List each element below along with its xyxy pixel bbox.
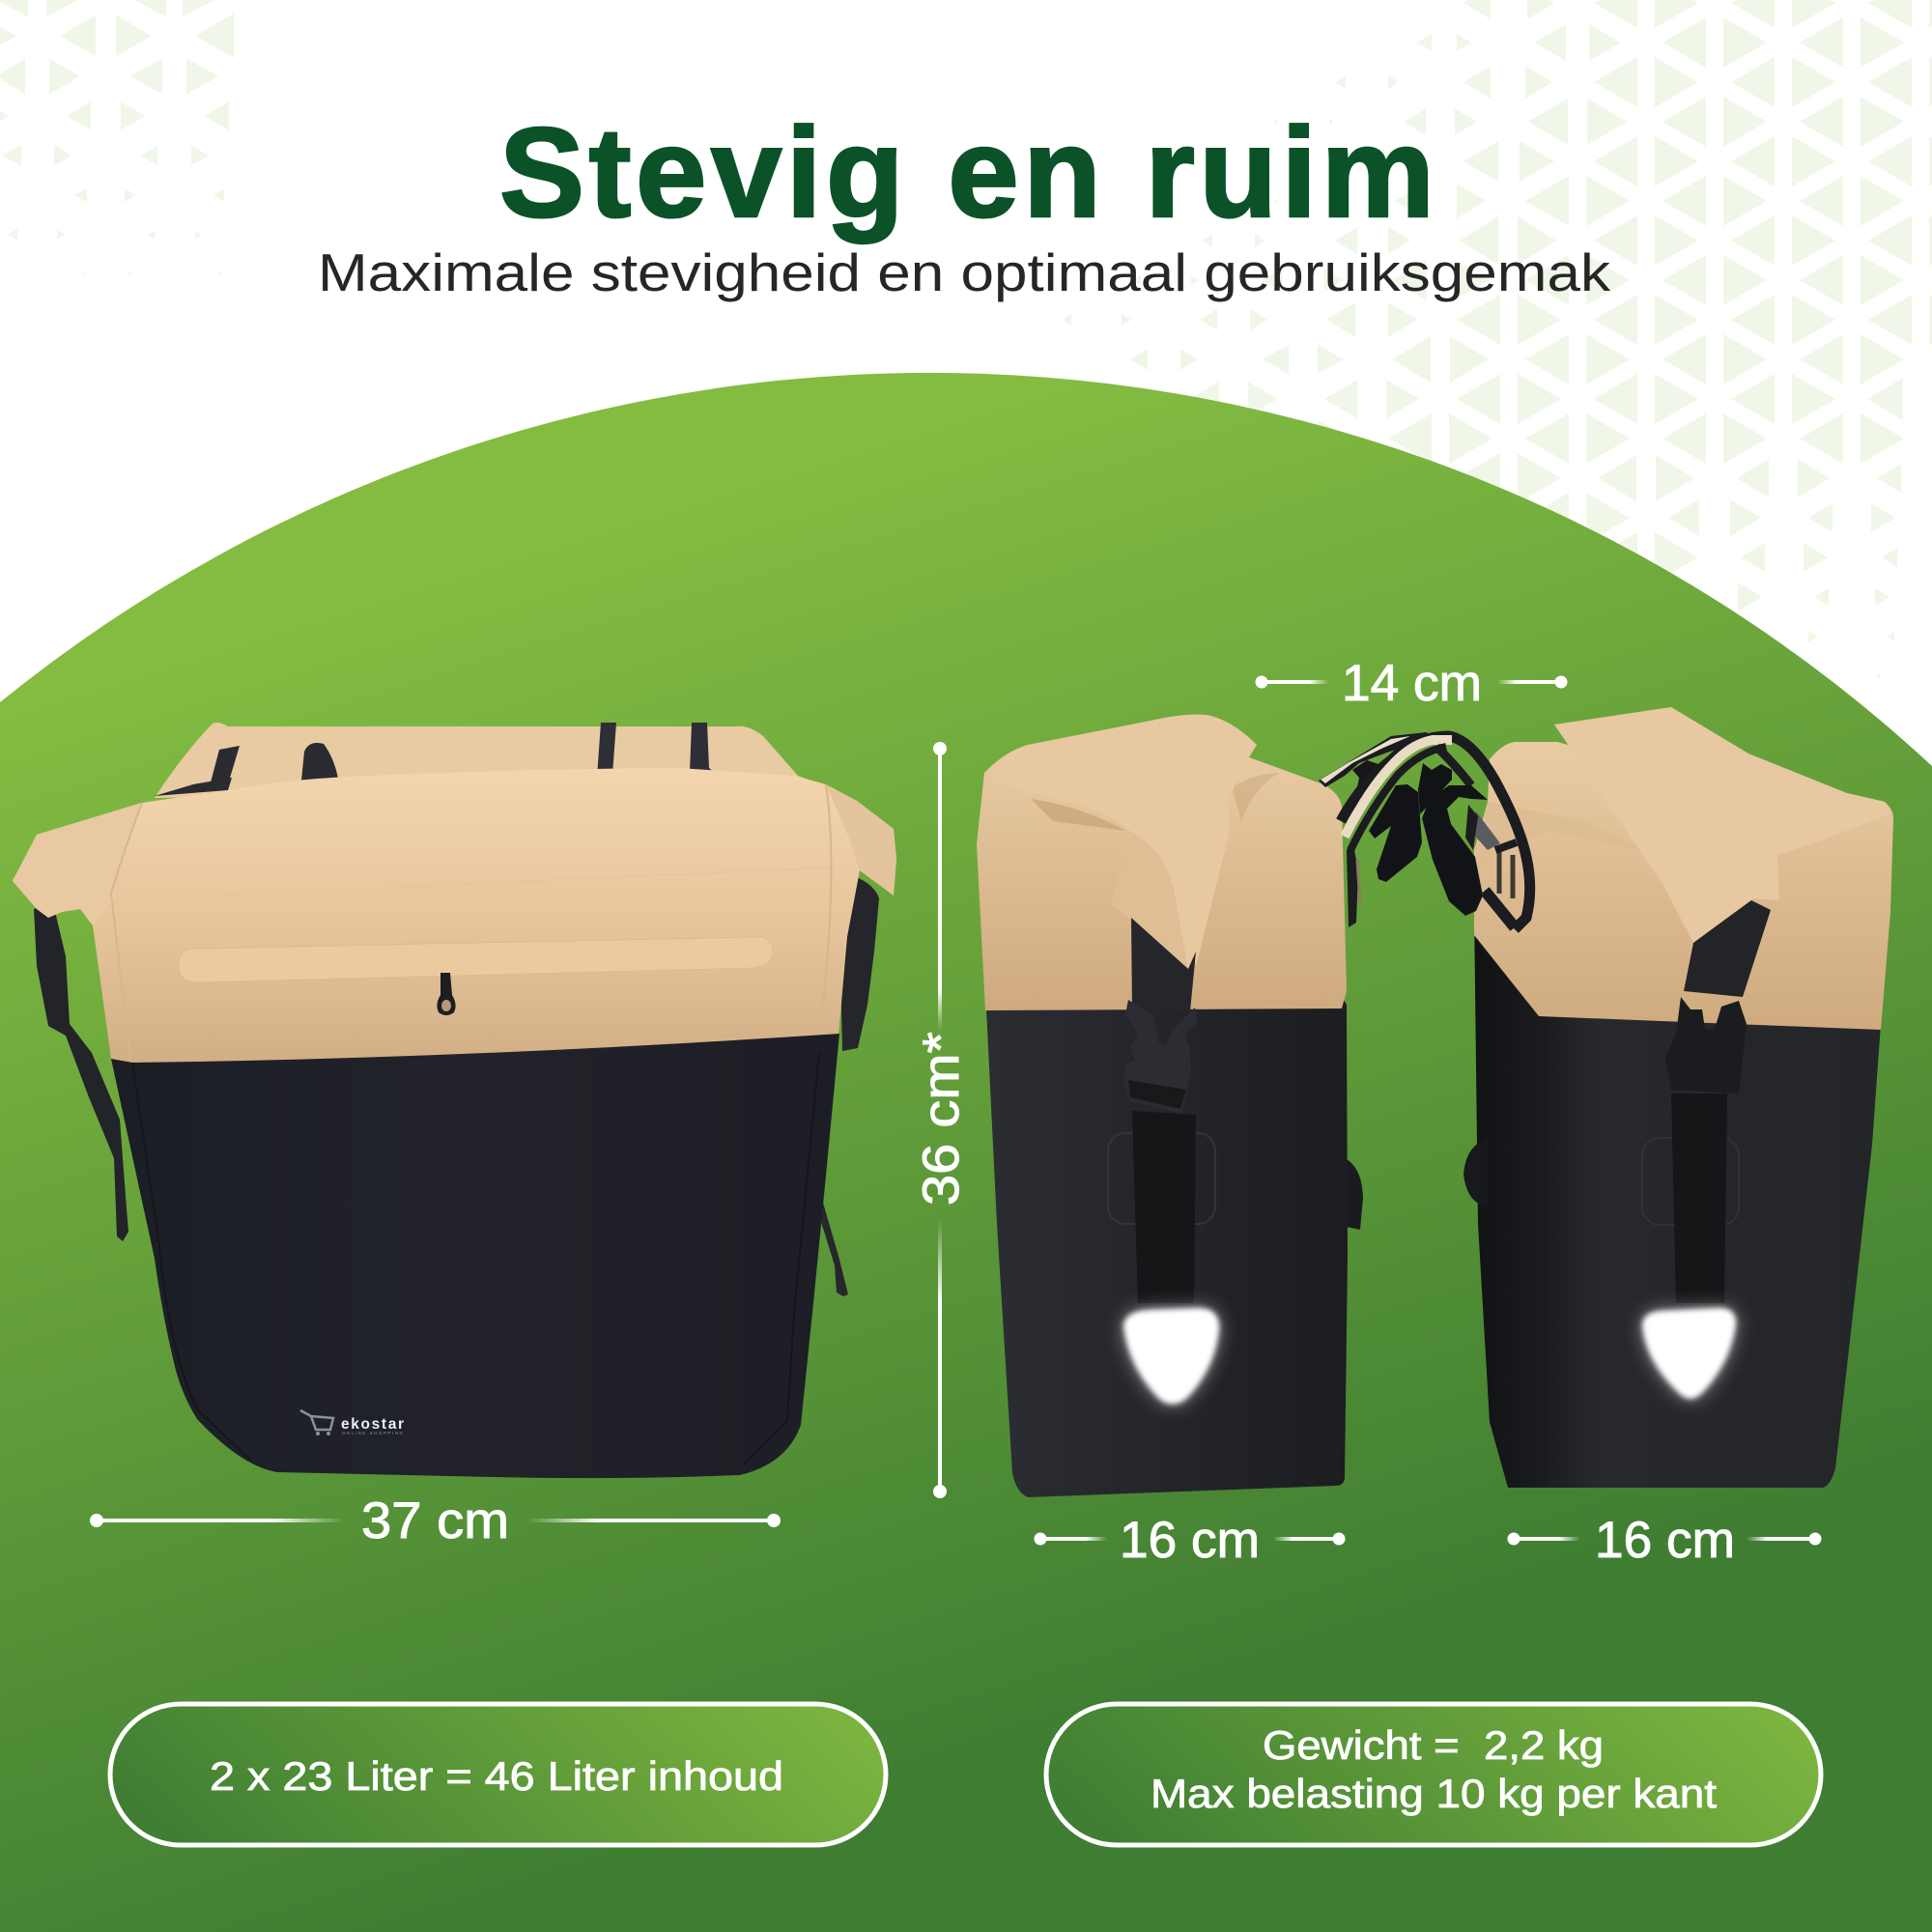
strap and buckle: [1123, 918, 1198, 1303]
strap and buckle: [1665, 900, 1771, 1303]
title: Stevig en ruim: [499, 101, 1435, 243]
photo: side view, left pannier: [977, 715, 1363, 1497]
rack mounting straps between panniers: [1319, 732, 1530, 929]
dimension: 16 cm right: [1507, 1512, 1822, 1569]
dimension: 14 cm: [1256, 655, 1567, 712]
brand logo: ekostar: [341, 1416, 404, 1433]
pill: capacity: 2 x 23 Liter = 46 Liter inhoud: [210, 1753, 783, 1799]
dimension: 16 cm left: 16 cm: [1120, 1512, 1260, 1569]
zipper pull: [437, 973, 456, 1015]
photo: front view of pannier: [13, 723, 896, 1478]
dimension: width 37 cm: [90, 1492, 781, 1549]
pill: weight and max load: [1046, 1704, 1821, 1845]
subtitle: Maximale stevigheid en optimaal gebruiksgemak: [318, 242, 1611, 302]
dimension: width 37 cm: 37 cm: [361, 1492, 509, 1549]
dimension: 14 cm: 14 cm: [1342, 655, 1482, 712]
reflector: [1642, 1308, 1736, 1399]
dimension: 16 cm left: [1034, 1512, 1345, 1569]
pocket flap: [179, 937, 773, 982]
reflector: [1123, 1308, 1219, 1405]
dimension: 16 cm right: 16 cm: [1595, 1512, 1735, 1569]
pill: weight and max load: Gewicht = 2,2 kg: [1263, 1722, 1604, 1768]
pill: weight and max load: Max belasting 10 kg per kant: [1151, 1771, 1717, 1816]
brand logo: ONLINE SHOPPING: [342, 1431, 403, 1435]
left strap and buckle: [34, 903, 128, 1241]
dimension: height 36 cm: [913, 742, 970, 1498]
dimension: height 36 cm: 36 cm*: [913, 1032, 970, 1206]
photo: side view, right pannier: [1463, 707, 1893, 1488]
brand logo: [300, 1410, 404, 1435]
pill: capacity: [110, 1704, 886, 1845]
